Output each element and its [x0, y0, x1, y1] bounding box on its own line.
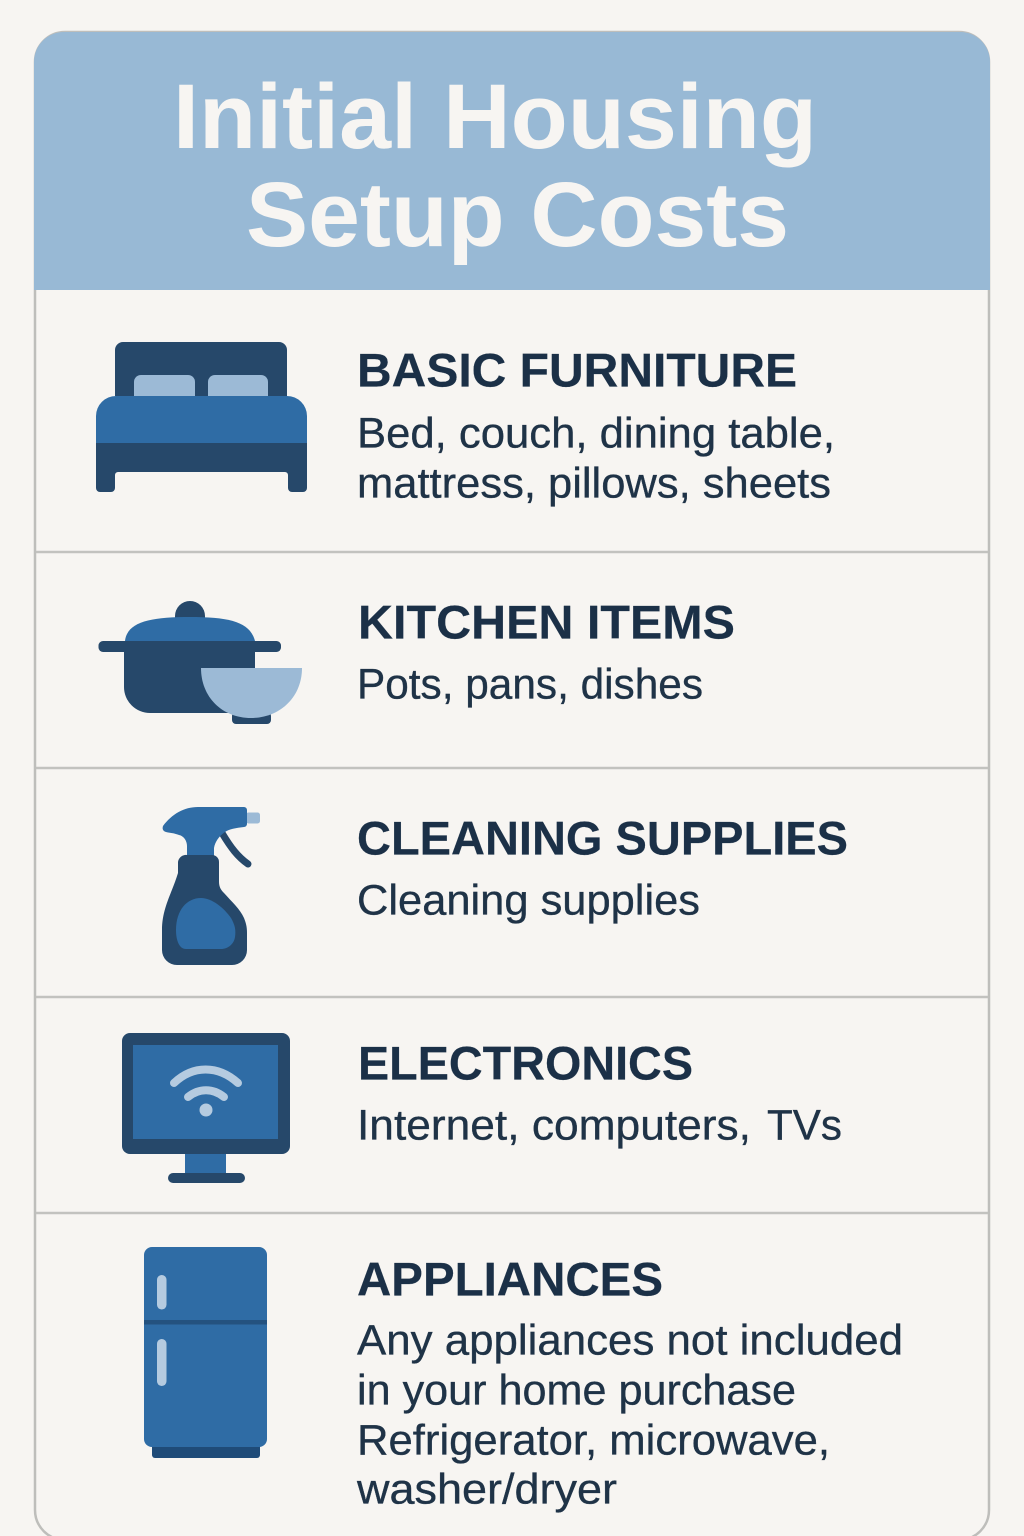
row: electronics: [122, 1033, 842, 1183]
heading: electronics: ELECTRONICS: [358, 1036, 693, 1090]
icon: pot and bowl: [98, 601, 302, 724]
row: kitchen items: [98, 596, 735, 724]
text: basic furniture details: [357, 410, 835, 508]
icon: monitor with wifi: [122, 1033, 290, 1183]
title: Setup Costs: [246, 164, 789, 266]
text: electronics details: Internet, computers,: [357, 1102, 751, 1150]
title: Initial Housing: [173, 66, 817, 168]
header band: [34, 32, 990, 290]
heading: kitchen items: KITCHEN ITEMS: [358, 596, 735, 648]
icon: spray bottle: [162, 807, 260, 965]
text: appliances details: in your home purchase: [357, 1366, 796, 1414]
text: appliances details: Refrigerator, microwave,: [357, 1416, 830, 1464]
text: appliances details: [356, 1316, 903, 1514]
title: [173, 66, 817, 266]
icon: refrigerator: [144, 1247, 267, 1458]
text: appliances details: washer/dryer: [356, 1466, 617, 1514]
heading: cleaning supplies: CLEANING SUPPLIES: [357, 812, 848, 864]
text: appliances details: Any appliances not included: [357, 1316, 903, 1364]
row: basic furniture: [96, 342, 835, 508]
text: kitchen details: Pots, pans, dishes: [357, 660, 703, 708]
row: appliances: [144, 1247, 903, 1514]
text: basic furniture details: Bed, couch, dining table,: [357, 410, 835, 458]
text: cleaning details: Cleaning supplies: [357, 876, 700, 924]
text: basic furniture details: mattress, pillows, sheets: [357, 460, 831, 508]
heading: basic furniture: BASIC FURNITURE: [357, 344, 797, 396]
text: electronics details: TVs: [767, 1102, 842, 1150]
row: cleaning supplies: [162, 807, 848, 965]
icon: bed: [96, 342, 307, 492]
heading: appliances: APPLIANCES: [357, 1252, 663, 1306]
